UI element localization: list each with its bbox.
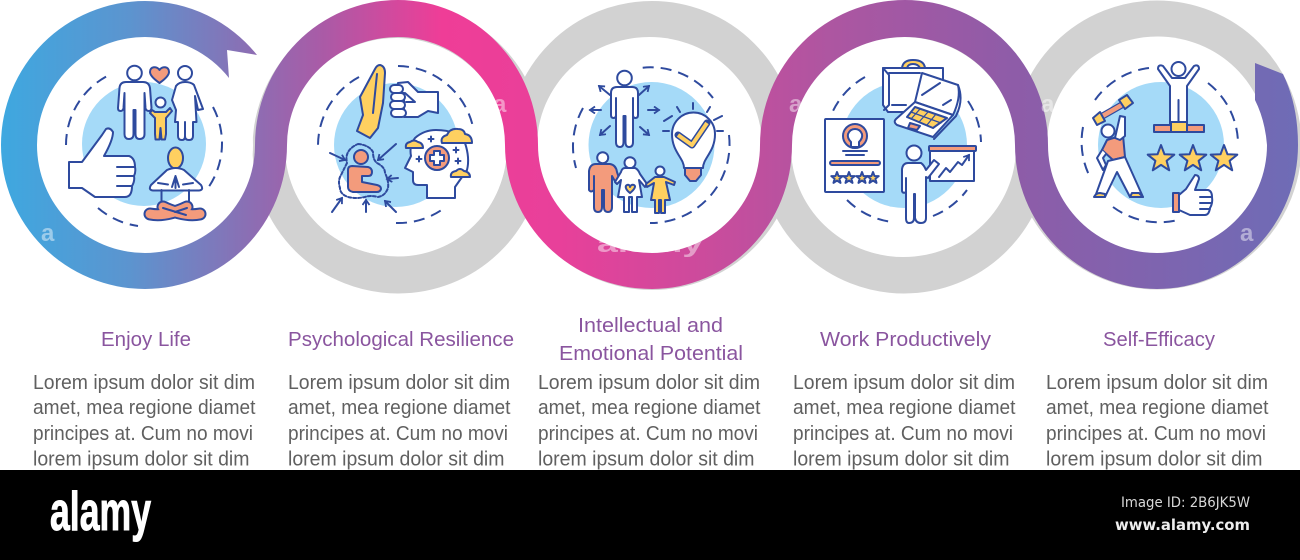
- head with plus: [405, 129, 472, 198]
- alamy logo: alamy: [50, 480, 151, 542]
- text block: Intellectual and Emotional Potential: principes at. Cum no movi: [538, 423, 758, 445]
- text block: Self-Efficacy: lorem ipsum dolor sit dim: [1046, 448, 1262, 470]
- text block: Intellectual and Emotional Potential: Lorem ipsum dolor sit dim: [538, 372, 760, 394]
- text block: Work Productively: Lorem ipsum dolor sit dim: [793, 372, 1015, 394]
- text block: Work Productively: lorem ipsum dolor sit dim: [793, 448, 1010, 470]
- text block: Enjoy Life: Lorem ipsum dolor sit dim: [33, 372, 255, 394]
- thumbs up: [69, 128, 135, 197]
- white discs: [37, 36, 1268, 257]
- icon 3: intellectual and emotional potential: [573, 67, 730, 223]
- text block: Enjoy Life: principes at. Cum no movi: [33, 423, 253, 445]
- winner on podium: [1154, 62, 1204, 132]
- text block: Self-Efficacy: [1046, 372, 1269, 470]
- text block: Enjoy Life: [33, 372, 256, 470]
- three stars: [1148, 145, 1237, 170]
- adult figure: [611, 71, 638, 147]
- icon 1: enjoy life: [66, 66, 222, 226]
- thumb up small: [1173, 175, 1212, 215]
- heading: Work Productively: Work Productively: [820, 329, 991, 351]
- heading: Intellectual and Emotional Potential: Emotional Potential: [559, 343, 743, 365]
- meditating person: [150, 148, 202, 215]
- child: [150, 98, 172, 140]
- text block: Work Productively: principes at. Cum no movi: [793, 423, 1013, 445]
- background rings: grey: [271, 19, 1283, 275]
- watermark marks: [41, 91, 1254, 258]
- text block: Psychological Resilience: amet, mea regione diamet: [288, 397, 511, 419]
- light bulb: [663, 103, 723, 181]
- text block: Work Productively: [793, 372, 1016, 470]
- watermark marks: a: [41, 220, 55, 247]
- text block: Self-Efficacy: amet, mea regione diamet: [1046, 397, 1269, 419]
- text block: Enjoy Life: lorem ipsum dolor sit dim: [33, 448, 250, 470]
- image id: Image ID: 2B6JK5W: [1121, 495, 1250, 511]
- heading: Self-Efficacy: Self-Efficacy: [1103, 329, 1215, 351]
- text block: Psychological Resilience: [288, 372, 511, 470]
- text block: Intellectual and Emotional Potential: [538, 372, 761, 470]
- resume card: [825, 119, 884, 192]
- heart: [150, 67, 169, 83]
- laptop: [895, 73, 961, 139]
- text block: Psychological Resilience: Lorem ipsum dolor sit dim: [288, 372, 510, 394]
- icon 5: self-efficacy: [1082, 62, 1238, 222]
- fist: [390, 82, 438, 117]
- pressure arrows: [330, 144, 398, 212]
- text block: Self-Efficacy: Lorem ipsum dolor sit dim: [1046, 372, 1268, 394]
- outward arrows: [590, 86, 659, 135]
- watermark marks: alamy: [597, 231, 704, 258]
- briefcase: [883, 60, 943, 112]
- woman: [172, 66, 203, 140]
- icon 2: psychological resilience: [318, 65, 473, 223]
- heading: Psychological Resilience: Psychological Resilience: [288, 329, 514, 351]
- watermark marks: a: [789, 91, 803, 118]
- text block: Self-Efficacy: principes at. Cum no movi: [1046, 423, 1266, 445]
- footer band: [0, 470, 1300, 560]
- text block: Enjoy Life: amet, mea regione diamet: [33, 397, 256, 419]
- heading: Intellectual and Emotional Potential: [559, 315, 743, 365]
- presenter and chart: [902, 146, 976, 223]
- text block: Intellectual and Emotional Potential: lorem ipsum dolor sit dim: [538, 448, 754, 470]
- protected child: [339, 144, 388, 198]
- man: [118, 66, 152, 139]
- weightlifter: [1093, 95, 1143, 197]
- watermark marks: a: [493, 91, 507, 118]
- family: [589, 152, 675, 213]
- site url: www.alamy.com: [1115, 516, 1250, 534]
- open hand: [357, 65, 385, 138]
- heading: Intellectual and Emotional Potential: Intellectual and: [578, 315, 723, 337]
- watermark marks: a: [1041, 91, 1055, 118]
- heading: Enjoy Life: Enjoy Life: [101, 329, 191, 351]
- text block: Intellectual and Emotional Potential: amet, mea regione diamet: [538, 397, 761, 419]
- gradient ribbon: [1, 0, 1298, 289]
- text block: Psychological Resilience: principes at. Cum no movi: [288, 423, 508, 445]
- text block: Work Productively: amet, mea regione diamet: [793, 397, 1016, 419]
- watermark marks: a: [1240, 220, 1254, 247]
- text block: Psychological Resilience: lorem ipsum dolor sit dim: [288, 448, 504, 470]
- icon 4: work productively: [825, 60, 981, 223]
